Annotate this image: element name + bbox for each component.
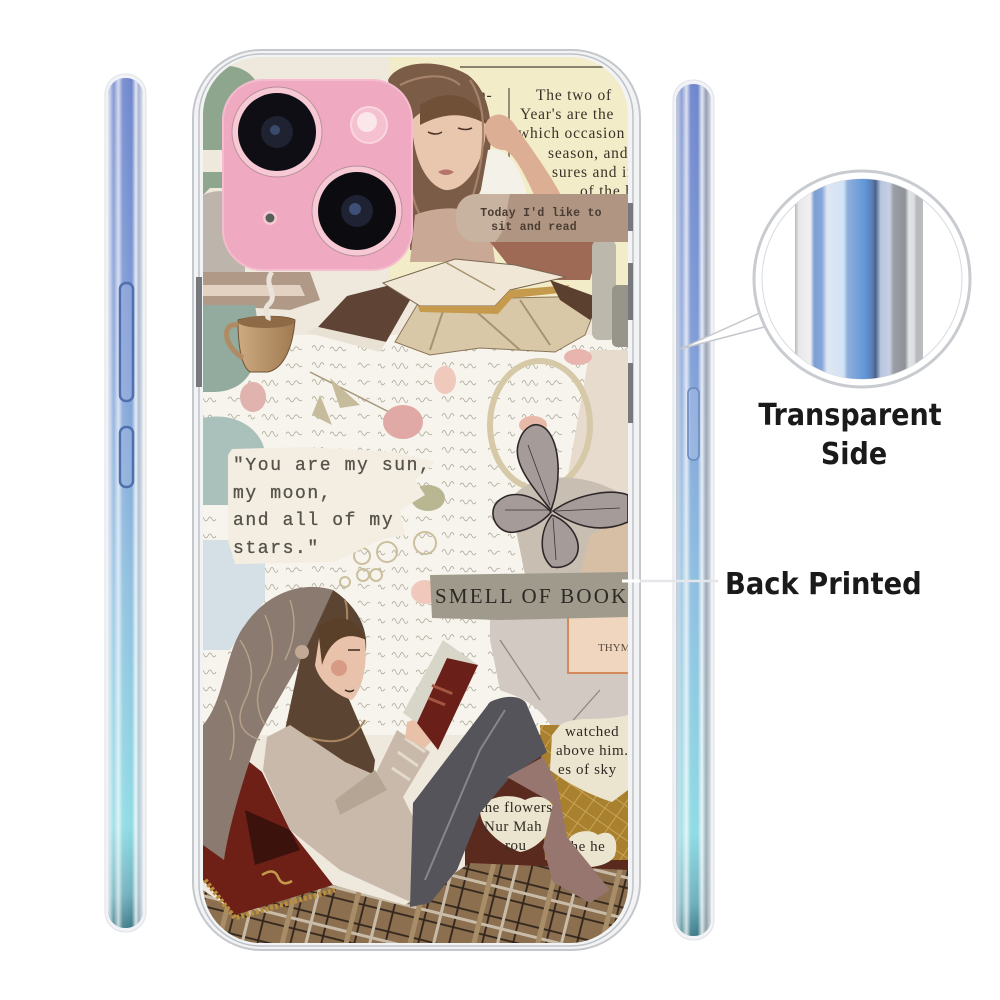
quote note — [228, 447, 435, 564]
icon: butterfly — [493, 425, 628, 567]
left side view of phone — [105, 74, 146, 932]
illustration: woman leaning at top — [388, 64, 600, 280]
speech note: Today I'd like to sit and read: Today I'd like to — [480, 207, 602, 220]
hand — [405, 718, 432, 748]
label strip: Smell of books — [430, 572, 629, 620]
text block: book page: Year's are the — [520, 106, 614, 123]
label: Back Printed: Back Printed — [725, 567, 922, 602]
panel: lower right page — [465, 715, 632, 870]
jeans — [410, 697, 547, 907]
text block: book page: The two of — [536, 87, 612, 104]
right side view of phone — [673, 80, 714, 940]
quote note: "You are my sun, — [233, 456, 431, 476]
panel: lower right page: above him. — [556, 743, 629, 759]
card: Thym — [567, 617, 628, 674]
panel: lower right page: es of sky — [558, 762, 617, 778]
label: Transparent Side: Side — [821, 437, 887, 472]
icon: left side volume buttons — [120, 283, 133, 487]
plaid blanket — [203, 863, 628, 945]
translucent hair veil — [203, 587, 333, 860]
pillow lower right — [490, 617, 628, 725]
text block: book page: n- — [478, 87, 493, 104]
panel: lower right page: rou — [505, 838, 526, 854]
panel: top book page — [390, 57, 636, 297]
panel: lower right page: watched — [565, 724, 619, 740]
main phone back case — [193, 50, 640, 950]
panel: lower right page: the flowers — [480, 800, 553, 816]
label: Transparent Side: Transparent — [758, 398, 942, 433]
icon: side power button — [688, 388, 699, 460]
panel: lower right page: Nur Mah — [484, 819, 542, 835]
card: Thym: THYM — [598, 642, 631, 654]
connector line: Back Printed — [622, 580, 718, 582]
icon: flash — [351, 107, 387, 143]
boot — [507, 757, 610, 903]
side slots — [196, 203, 633, 423]
icon: top lens — [232, 87, 322, 177]
camera island — [223, 80, 412, 270]
quote note: my moon, — [233, 484, 332, 504]
illustration: reading woman — [203, 587, 610, 907]
quote note: stars." — [233, 539, 320, 559]
speech note: Today I'd like to sit and read: sit and read — [491, 221, 577, 234]
sage circle — [203, 305, 258, 392]
speech note: Today I'd like to sit and read — [456, 194, 636, 242]
panel: lower right page: the he — [566, 839, 605, 855]
text block: book page: which occasion — [518, 125, 625, 142]
panel: torn paper right — [490, 350, 630, 575]
sweater — [263, 725, 430, 905]
icon: microphone — [263, 211, 277, 225]
panel: handwritten letter background — [203, 335, 628, 735]
icon: bottom lens — [312, 166, 402, 256]
icon: coffee cup — [227, 272, 295, 372]
green shapes top left — [203, 66, 255, 280]
illustration: books — [305, 240, 632, 355]
bubble rings — [340, 532, 436, 587]
quote note: and all of my — [233, 511, 394, 531]
text block: book page: sures and in — [552, 164, 636, 181]
label strip: Smell of books: SMELL OF BOOK — [435, 584, 629, 608]
text block: book page: season, and — [548, 145, 628, 162]
left red cushion — [203, 762, 336, 920]
callout: magnified transparent side — [680, 171, 970, 387]
illustration: table and sleeping cat — [203, 272, 320, 310]
book — [403, 640, 478, 723]
text block: book page: of the h — [580, 183, 634, 200]
roses and leaves — [240, 349, 592, 604]
hair — [285, 590, 375, 785]
